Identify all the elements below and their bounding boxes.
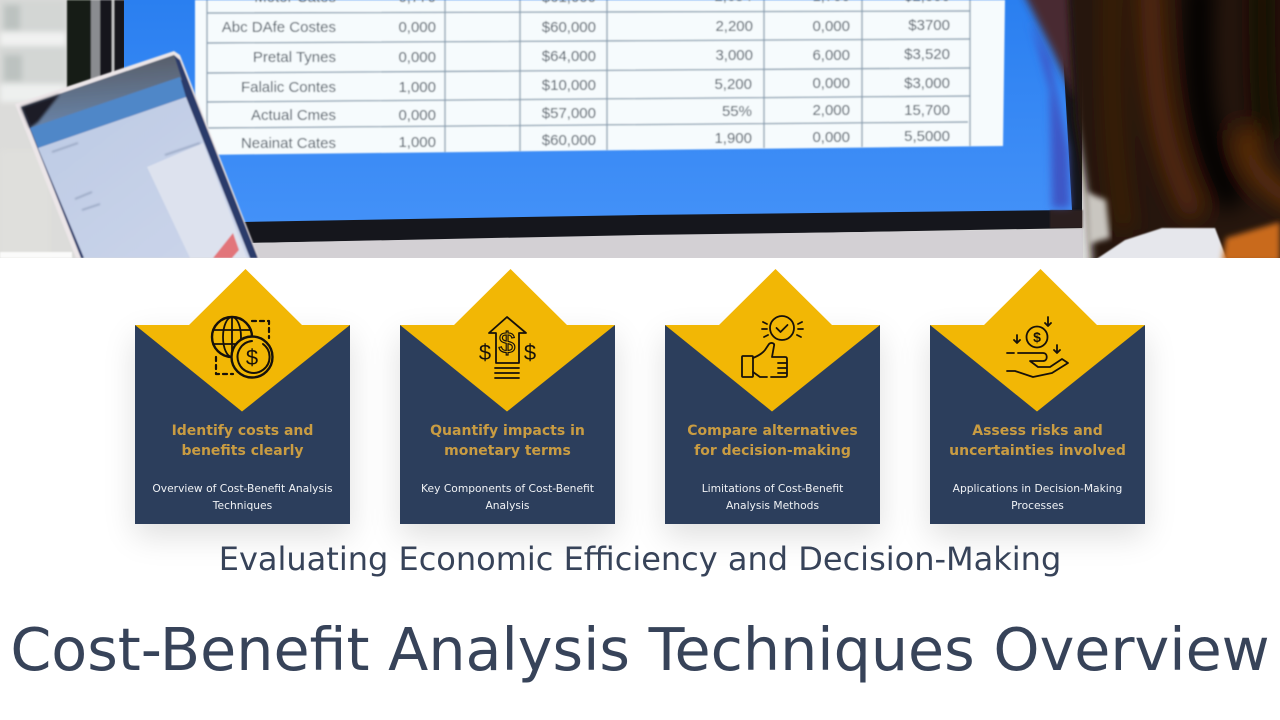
spreadsheet on screen: Abc DAfe Costes	[222, 19, 336, 36]
spreadsheet on screen: 55%	[722, 103, 752, 120]
subtitle: Evaluating Economic Efficiency and Decision-Making	[219, 540, 1061, 578]
card description: Overview of Cost-Benefit Analysis	[152, 482, 333, 495]
spreadsheet on screen: 5,200	[714, 76, 752, 93]
spreadsheet on screen: $3700	[908, 17, 950, 34]
card description	[952, 482, 1122, 512]
spreadsheet on screen: 0,000	[812, 18, 850, 35]
spreadsheet on screen: Pretal Tynes	[253, 49, 336, 66]
spreadsheet on screen: 3,000	[715, 47, 753, 64]
gold envelope shape with icon: coin falling on hand: $	[1033, 329, 1041, 345]
card heading: for decision-making	[694, 442, 851, 458]
spreadsheet on screen: 15,700	[904, 102, 950, 119]
spreadsheet on screen: 5,5000	[904, 128, 950, 145]
card heading	[172, 422, 313, 458]
spreadsheet on screen: $10,000	[542, 77, 596, 94]
spreadsheet on screen: 2,200	[715, 18, 753, 35]
card description: Analysis Methods	[726, 499, 819, 512]
spreadsheet on screen	[195, 0, 1005, 155]
spreadsheet on screen: 1,900	[714, 130, 752, 147]
card heading	[949, 422, 1126, 458]
card description: Processes	[1011, 499, 1064, 512]
card heading: uncertainties involved	[949, 442, 1126, 458]
gold envelope shape with icon: globe and coin	[135, 269, 350, 412]
panel: identify costs	[125, 269, 360, 546]
panel: assess risks	[920, 269, 1155, 546]
spreadsheet on screen: $3,000	[904, 75, 950, 92]
person's hair	[1022, 0, 1280, 290]
spreadsheet on screen: 1,000	[398, 79, 436, 96]
spreadsheet on screen: Neainat Cates	[241, 135, 336, 152]
card description: Key Components of Cost-Benefit	[421, 482, 594, 495]
spreadsheet on screen: $60,000	[542, 19, 596, 36]
spreadsheet on screen: 0,000	[812, 129, 850, 146]
card description: Limitations of Cost-Benefit	[702, 482, 843, 495]
gold envelope shape with icon: globe and coin: $	[246, 345, 258, 370]
spreadsheet on screen: 0,000	[398, 19, 436, 36]
spreadsheet on screen: 1,000	[398, 134, 436, 151]
hero photo: monitor with spreadsheet, laptop and person	[0, 0, 1280, 258]
gold envelope shape with icon: coin falling on hand	[930, 269, 1145, 412]
card description	[421, 482, 594, 512]
spreadsheet on screen: 0,000	[398, 49, 436, 66]
card description	[152, 482, 333, 512]
spreadsheet on screen: Actual Cmes	[251, 107, 336, 124]
gold envelope shape with icon: rising dollar arrow: $	[479, 340, 491, 365]
gold envelope shape with icon: thumbs up and check	[665, 269, 880, 412]
spreadsheet on screen: 6,000	[812, 47, 850, 64]
spreadsheet on screen: Falalic Contes	[241, 79, 336, 96]
card heading: monetary terms	[444, 442, 571, 458]
gold envelope shape with icon: rising dollar arrow	[400, 269, 615, 412]
card heading	[430, 422, 585, 458]
laptop	[15, 51, 259, 258]
panel: quantify impacts	[390, 269, 625, 546]
gold envelope shape with icon: rising dollar arrow: $	[524, 340, 536, 365]
gold envelope shape with icon: rising dollar arrow: $	[499, 327, 516, 360]
card heading: Identify costs and	[172, 422, 313, 438]
spreadsheet on screen: $3,520	[904, 46, 950, 63]
spreadsheet on screen: $64,000	[542, 48, 596, 65]
card heading: Assess risks and	[972, 422, 1103, 438]
card description: Applications in Decision-Making	[953, 482, 1122, 495]
card description	[702, 482, 844, 512]
panel: compare alternatives	[655, 269, 890, 546]
card heading: Compare alternatives	[687, 422, 858, 438]
spreadsheet on screen: 0,000	[812, 75, 850, 92]
card heading: benefits clearly	[181, 442, 304, 458]
spreadsheet on screen: 0,000	[398, 107, 436, 124]
spreadsheet on screen: $57,000	[542, 105, 596, 122]
card heading: Quantify impacts in	[430, 422, 585, 438]
card heading	[687, 422, 858, 458]
spreadsheet on screen: 2,000	[812, 102, 850, 119]
card description: Analysis	[485, 499, 530, 512]
card description: Techniques	[213, 499, 272, 512]
title: Cost-Benefit Analysis Techniques Overview	[10, 616, 1270, 684]
spreadsheet on screen: $60,000	[542, 132, 596, 149]
